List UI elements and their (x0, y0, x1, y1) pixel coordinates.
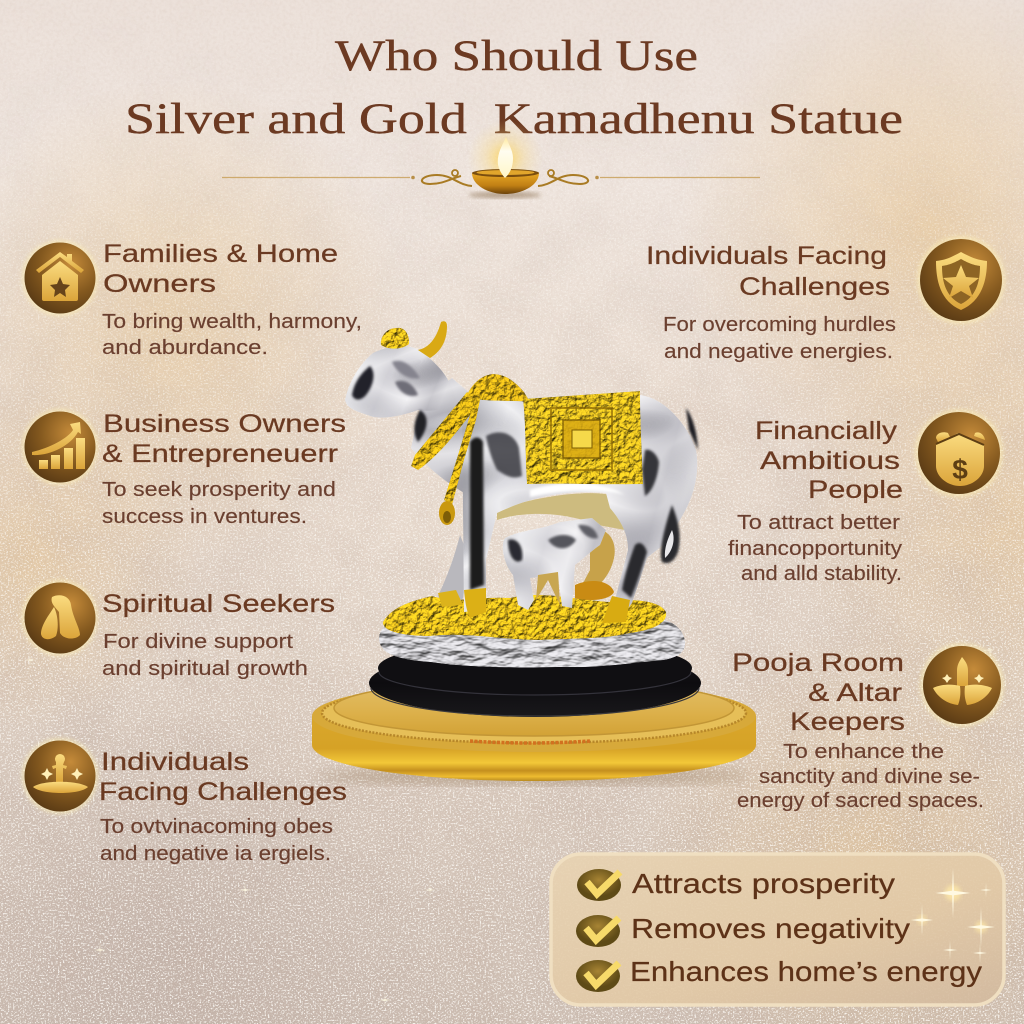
icon: house with star (22, 240, 98, 316)
left item: business owners: & Entrepreneuerr (102, 440, 338, 468)
description: To ovtvinacoming obes (100, 816, 333, 838)
description: For overcoming hurdles (663, 314, 896, 336)
title: Silver and Gold Kamadhenu Statue (125, 96, 903, 143)
description: To seek prosperity and (102, 479, 336, 501)
benefits callout panel (551, 854, 1004, 1005)
icon: shield with star (917, 236, 1005, 324)
right item: individuals facing challenges: Challenges (739, 273, 890, 301)
heading: Individuals Facing (646, 242, 887, 270)
description: To attract better (737, 512, 900, 534)
left item: spiritual seekers (22, 580, 335, 680)
gold ground (383, 595, 666, 640)
icon: check (576, 915, 620, 947)
icon: check (576, 960, 620, 992)
item: removes negativity: Removes negativity (631, 913, 910, 944)
icon: lamp with sparkles (22, 738, 98, 814)
icon: praying hands (22, 580, 98, 656)
icon: money bag: $ (952, 454, 968, 485)
heading: Families & Home (103, 240, 338, 268)
right item: pooja room and altar keepers: sanctity and divine se- (759, 766, 980, 788)
right item: pooja room and altar keepers (732, 643, 1004, 812)
left item: spiritual seekers: and spiritual growth (102, 658, 308, 680)
right item: financially ambitious people: People (808, 476, 903, 504)
description: To bring wealth, harmony, (102, 311, 362, 333)
heading: Individuals (101, 748, 249, 776)
right item: individuals facing challenges (646, 236, 1005, 363)
right item: financially ambitious people: Ambitious (760, 447, 900, 475)
right item: financially ambitious people: financopportunity (728, 538, 902, 560)
hump ornament (466, 374, 530, 402)
left item: individuals facing challenges: Facing Challenges (99, 778, 347, 806)
item: enhances home's energy (576, 956, 982, 992)
left item: families and home owners (22, 240, 362, 359)
garland and bell (411, 392, 480, 505)
left item: individuals facing challenges: and negative ia ergiels. (100, 843, 331, 865)
description: For divine support (103, 631, 294, 653)
udder and belly gold reflection (497, 493, 625, 530)
hooves and gold pile (575, 581, 614, 600)
title (125, 33, 903, 143)
icon: growth chart (22, 409, 98, 485)
item: enhances home's energy: Enhances home’s energy (630, 956, 982, 987)
item: attracts prosperity: Attracts prosperity (632, 868, 895, 899)
title: Who Should Use (335, 33, 698, 80)
right item: financially ambitious people (728, 409, 1003, 585)
gold plate (312, 680, 756, 785)
silver body, neck and head (345, 346, 697, 613)
diya lamp divider (222, 120, 760, 198)
silver rock base (379, 618, 685, 667)
black base (369, 640, 701, 717)
statue: silver and gold Kamadhenu on gold plate (312, 321, 756, 785)
right item: pooja room and altar keepers: Keepers (790, 708, 905, 736)
horn and crown (418, 321, 447, 358)
icon: candle and hands (920, 643, 1004, 727)
left item: individuals facing challenges (22, 738, 347, 865)
icon: money bag (915, 409, 1003, 497)
left item: business owners (22, 409, 346, 528)
left item: business owners: success in ventures. (102, 506, 307, 528)
heading: Financially (755, 417, 898, 445)
right item: pooja room and altar keepers: energy of sacred spaces. (737, 790, 984, 812)
calf (503, 518, 606, 610)
body reflections (470, 408, 698, 598)
item: removes negativity (576, 913, 910, 947)
right item: individuals facing challenges: and negative energies. (664, 341, 893, 363)
far legs (438, 535, 470, 603)
saddle blanket (523, 391, 643, 484)
right item: financially ambitious people: and alld stability. (741, 563, 902, 585)
tail (661, 505, 680, 563)
left item: families and home owners: and aburdance. (102, 337, 268, 359)
item: attracts prosperity (577, 868, 895, 901)
face reflections (352, 361, 427, 442)
description: To enhance the (783, 741, 944, 763)
icon: check (577, 869, 621, 901)
right item: pooja room and altar keepers: & Altar (808, 679, 902, 707)
heading: Business Owners (103, 410, 346, 438)
left item: families and home owners: Owners (103, 270, 216, 298)
heading: Spiritual Seekers (102, 590, 335, 618)
sparkles (911, 868, 995, 963)
cow (345, 321, 698, 623)
heading: Pooja Room (732, 649, 904, 677)
